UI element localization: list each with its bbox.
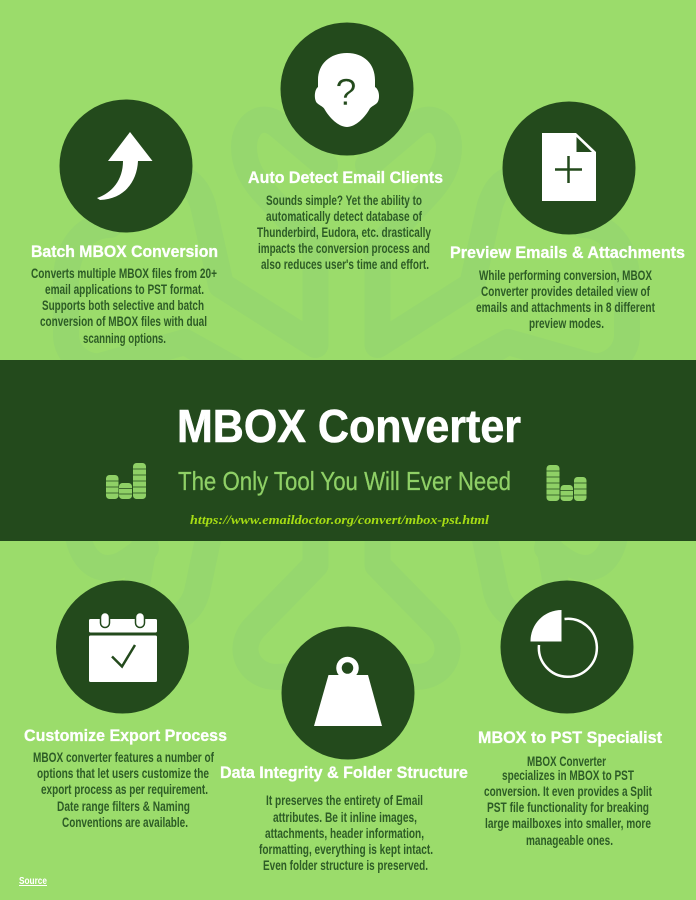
text block (259, 792, 433, 873)
icon: curved up arrow (60, 100, 192, 232)
url: https://www.emaildoctor.org/convert/mbox-pst.html (190, 512, 489, 527)
icon: right coin stacks (546, 465, 586, 501)
text block: specializes in MBOX to PST (502, 767, 634, 783)
text block: formatting, everything is kept intact. (259, 841, 433, 857)
text block: Converts multiple MBOX files from 20+ (31, 265, 217, 281)
heading: Preview Emails & Attachments (450, 243, 685, 262)
text block: Supports both selective and batch (42, 297, 204, 313)
text block (31, 265, 217, 346)
heading: Auto Detect Email Clients (248, 168, 443, 187)
icon: head with question mark (280, 22, 414, 156)
text block: also reduces user's time and effort. (261, 256, 429, 272)
text block: scanning options. (83, 330, 166, 346)
text block: attributes. Be it inline images, (273, 809, 417, 825)
text block: Even folder structure is preserved. (263, 857, 428, 873)
central title band (0, 360, 696, 541)
text block: manageable ones. (526, 832, 613, 848)
icon: weight (282, 626, 414, 760)
text block: email applications to PST format. (45, 281, 204, 297)
panel: customize export (24, 580, 227, 830)
heading: Customize Export Process (24, 726, 227, 745)
text block: automatically detect database of (266, 208, 422, 224)
text block: export process as per requirement. (41, 781, 208, 797)
heading: MBOX to PST Specialist (478, 728, 662, 747)
background flower watermark (66, 120, 627, 677)
text block: Date range filters & Naming (57, 798, 190, 814)
icon: document with plus (502, 102, 636, 234)
icon: left coin stacks (106, 463, 146, 499)
text block: Sounds simple? Yet the ability to (266, 192, 422, 208)
icon: pie ring (500, 580, 634, 714)
text block: preview modes. (529, 315, 604, 331)
panel: auto detect (248, 22, 443, 272)
text block: attachments, header information, (265, 825, 424, 841)
text block: conversion of MBOX files with dual (40, 313, 207, 329)
source link: Source (19, 876, 47, 887)
text block (33, 749, 214, 830)
icon: head with question mark: ? (335, 72, 357, 114)
panel: preview emails (450, 102, 685, 331)
text block (257, 192, 431, 272)
text block: options that let users customize the (37, 765, 209, 781)
text block: impacts the conversion process and (258, 240, 430, 256)
text block: MBOX Converter (527, 753, 606, 769)
text block: Conventions are available. (62, 814, 188, 830)
text block (484, 753, 652, 848)
heading: Data Integrity & Folder Structure (220, 763, 468, 782)
main title: MBOX Converter (177, 400, 521, 452)
text block: Thunderbird, Eudora, etc. drastically (257, 224, 431, 240)
text block: MBOX converter features a number of (33, 749, 214, 765)
heading: Batch MBOX Conversion (31, 242, 218, 261)
panel: data integrity (220, 626, 468, 873)
panel: batch conversion (31, 100, 218, 346)
subtitle: The Only Tool You Will Ever Need (178, 466, 511, 496)
icon: calendar with check (56, 580, 189, 714)
text block: It preserves the entirety of Email (266, 792, 423, 808)
text block (476, 267, 655, 331)
panel: mbox to pst specialist (478, 580, 662, 848)
